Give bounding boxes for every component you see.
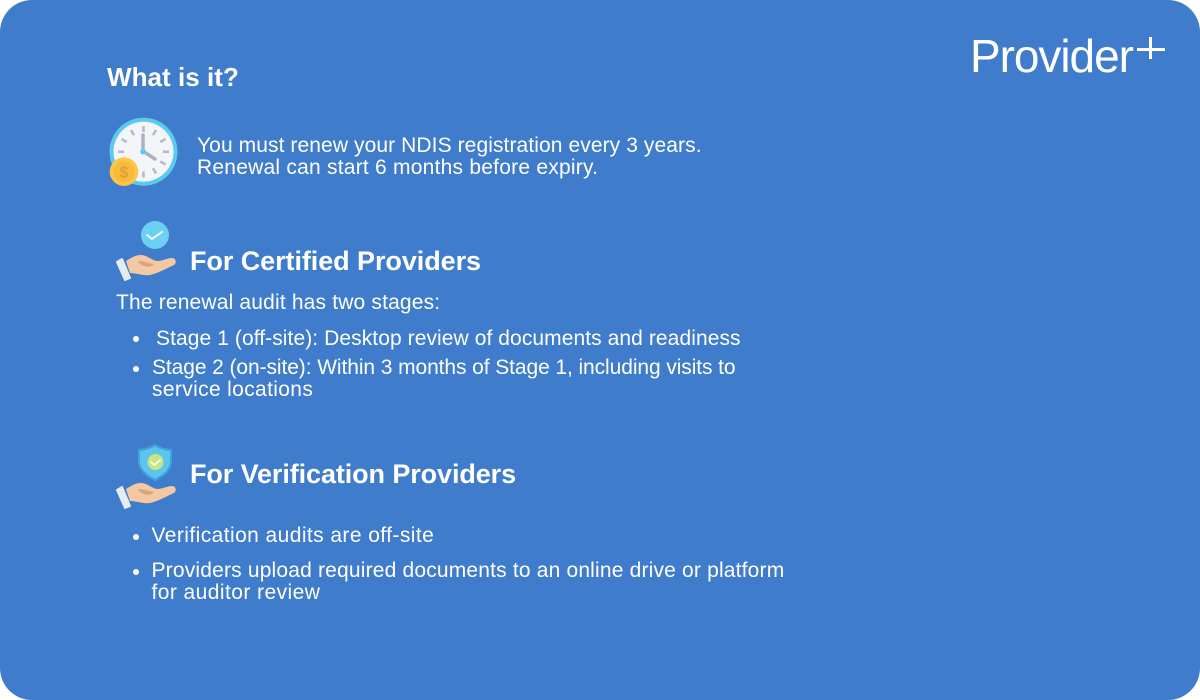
text: renewal timing: You must renew your NDIS registration every 3 years. (197, 134, 702, 157)
heading: What is it?: What is it? (107, 62, 239, 92)
list: verification points: Providers upload required documents to an online drive or platform (152, 559, 784, 582)
list: verification points: for auditor review (152, 580, 320, 604)
heading: For Verification Providers: For Verification Providers (190, 459, 516, 489)
text: renewal timing: Renewal can start 6 months before expiry. (197, 156, 598, 178)
text: audit intro: The renewal audit has two stages: (116, 291, 440, 314)
list: audit stages (133, 327, 741, 400)
logo: Provider+: Provider (970, 30, 1133, 82)
icon: hand with check badge (116, 221, 176, 281)
text: renewal timing (197, 134, 702, 178)
icon: clock with coin: $ (120, 164, 129, 182)
icon: clock with coin (110, 118, 178, 186)
list: audit stages: Stage 1 (off-site): Desktop review of documents and readiness (156, 327, 741, 350)
list: audit stages: Stage 2 (on-site): Within 3 months of Stage 1, including visits to (152, 356, 736, 379)
list: audit stages: service locations (152, 378, 313, 400)
heading: For Certified Providers: For Certified Providers (190, 246, 481, 276)
icon: hand with shield (116, 444, 176, 509)
list: verification points (133, 524, 784, 604)
list: verification points: Verification audits are off-site (152, 524, 434, 547)
